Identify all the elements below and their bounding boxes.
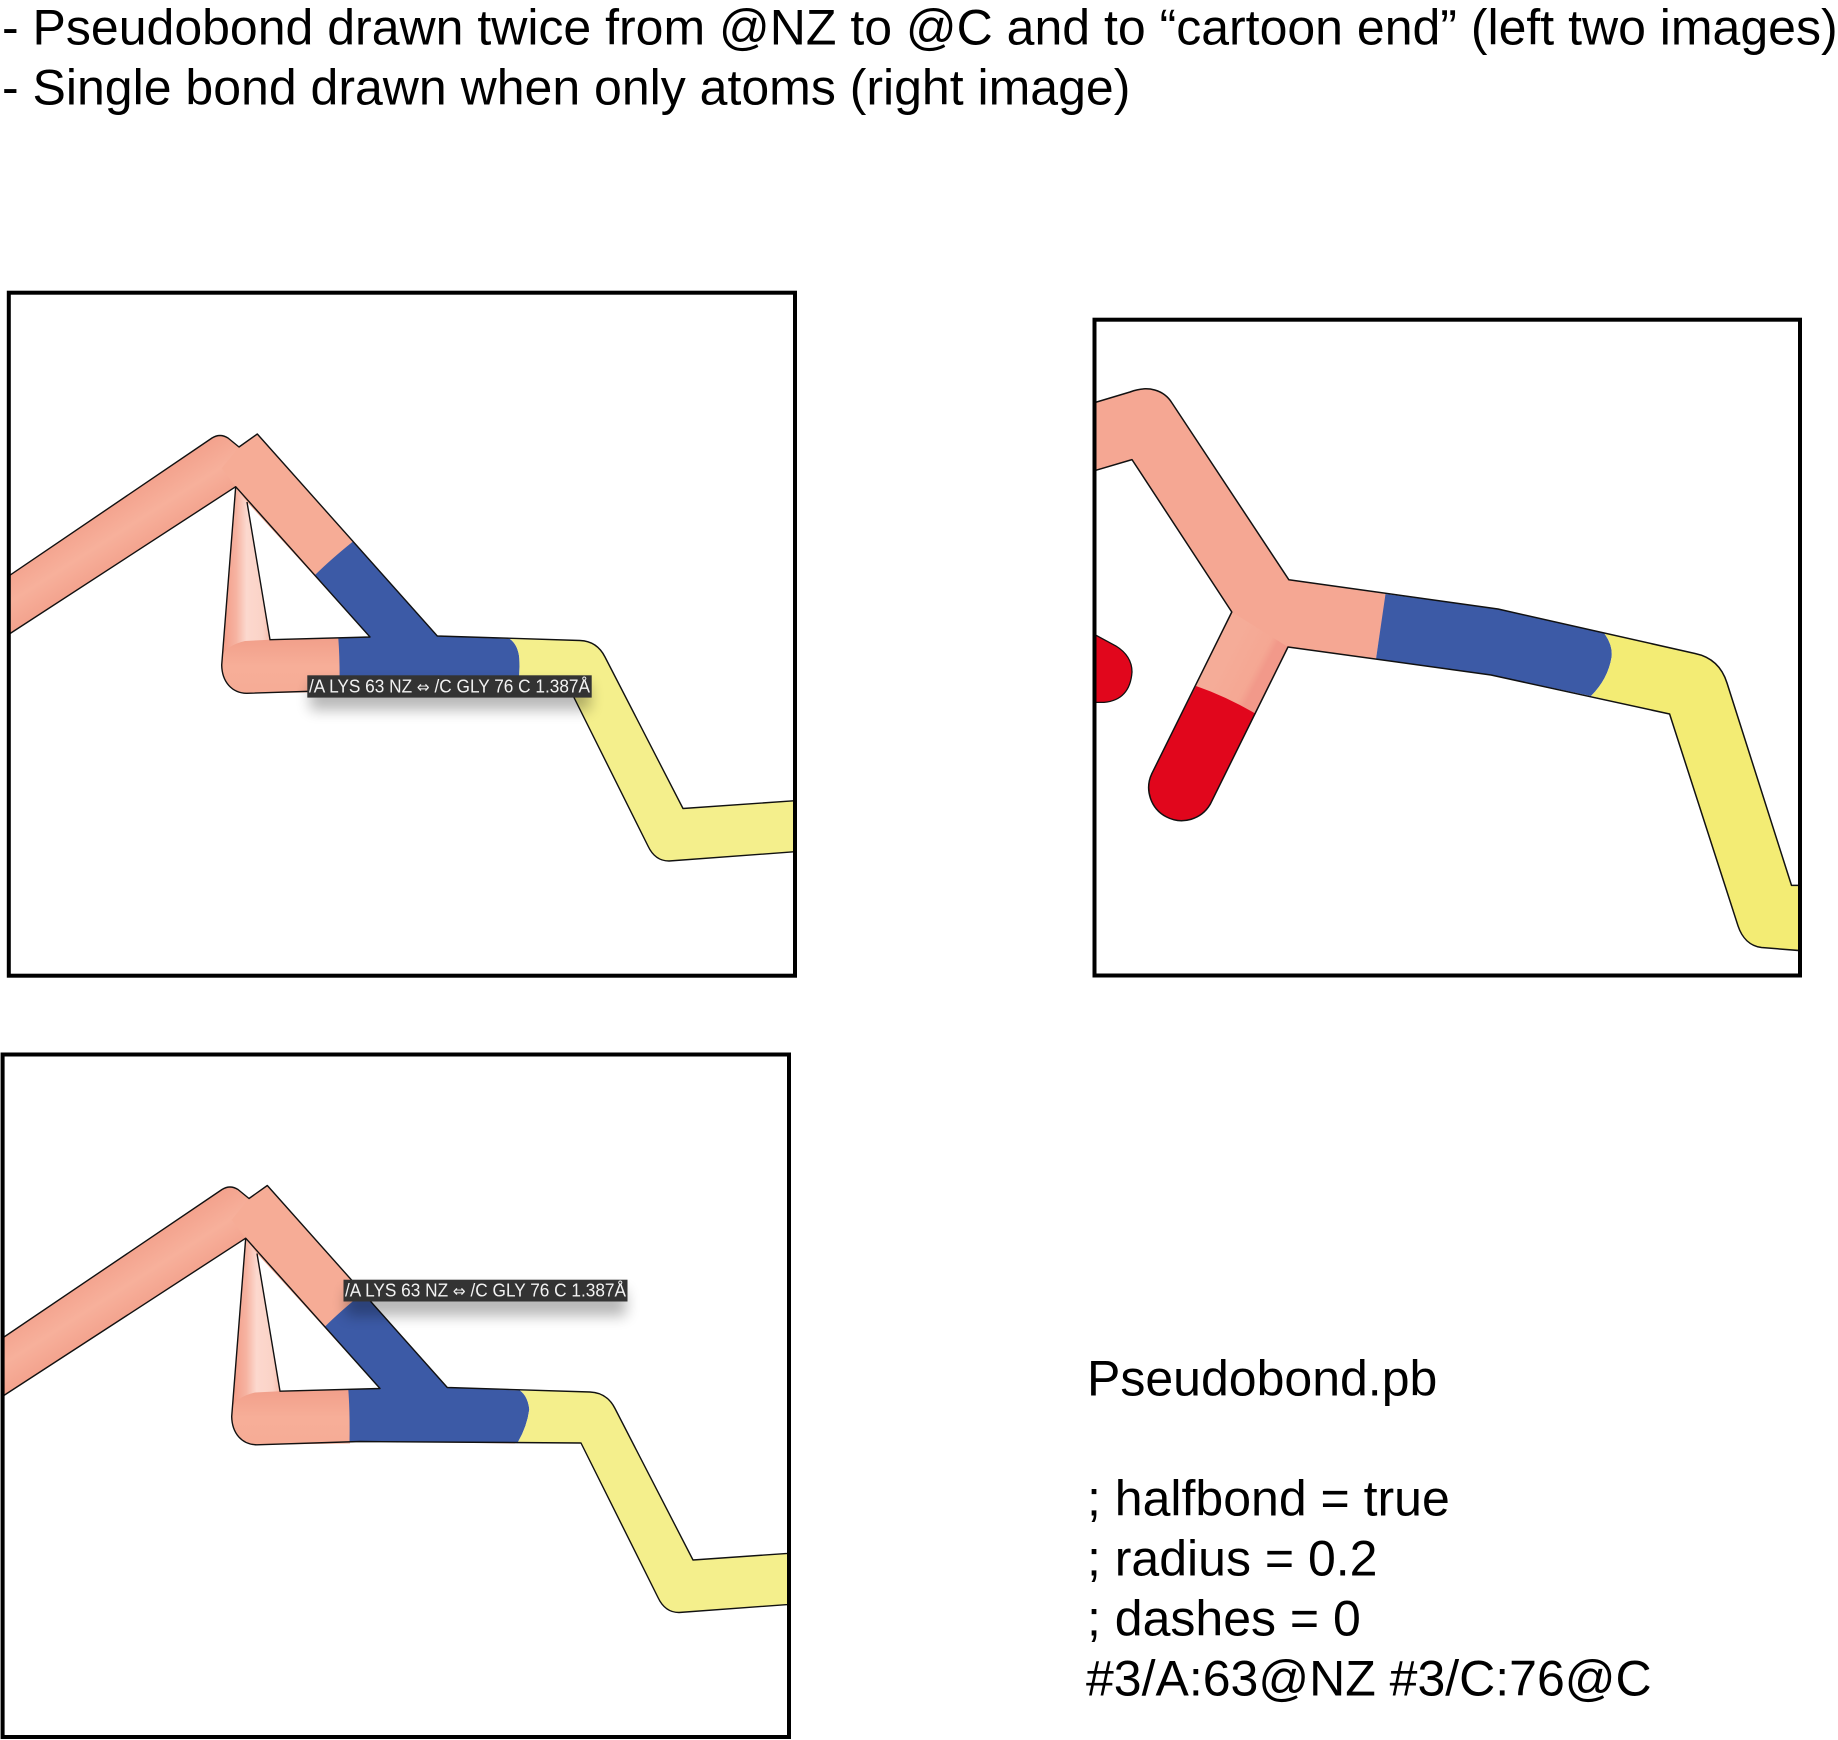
panel: pseudobond with cartoon, label on bond xyxy=(0,293,805,976)
panel: pseudobond with cartoon, label moved xyxy=(0,1054,815,1737)
tooltip: distance label: /A LYS 63 NZ ⇔ /C GLY 76 C 1.387Å xyxy=(345,1281,626,1301)
text block: Pseudobond.pb file contents: #3/A:63@NZ #3/C:76@C xyxy=(1086,1650,1652,1706)
panel frame xyxy=(9,293,795,976)
panel frame xyxy=(3,1054,789,1737)
text block: Pseudobond.pb file contents: ; radius = 0.2 xyxy=(1087,1530,1377,1586)
molecule: stick model with pseudobond xyxy=(0,434,805,861)
heading: pseudobond notes xyxy=(2,0,1838,116)
heading: pseudobond notes: - Single bond drawn when only atoms (right image) xyxy=(2,60,1130,116)
text block: Pseudobond.pb file contents: ; halfbond = true xyxy=(1087,1470,1450,1526)
tooltip: distance label xyxy=(307,675,592,710)
tooltip: distance label: /A LYS 63 NZ ⇔ /C GLY 76 C 1.387Å xyxy=(309,676,590,696)
tooltip: distance label xyxy=(344,1280,628,1316)
molecule: stick model with pseudobond xyxy=(0,1186,815,1612)
heading: pseudobond notes: - Pseudobond drawn twice from @NZ to @C and to “cartoon end” (left two images) xyxy=(2,0,1838,56)
text block: Pseudobond.pb file contents xyxy=(1086,1350,1652,1706)
text block: Pseudobond.pb file contents: ; dashes = 0 xyxy=(1087,1590,1361,1646)
panel frame xyxy=(1094,320,1800,976)
molecule: stick model atoms only xyxy=(1090,389,1805,951)
text block: Pseudobond.pb file contents: Pseudobond.pb xyxy=(1087,1350,1437,1406)
panel: single bond, atoms only xyxy=(1090,320,1805,976)
